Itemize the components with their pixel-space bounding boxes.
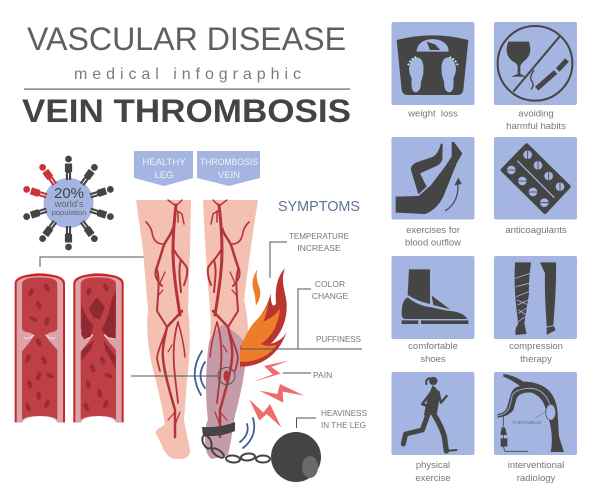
- icon: runner: [403, 377, 456, 451]
- healthy vessel: [15, 273, 65, 422]
- icon: pulse waves near clot: [195, 351, 205, 395]
- icon: ball and chain: [200, 422, 321, 482]
- icon: blister pack: [503, 145, 569, 212]
- icon: shoe: [402, 269, 468, 324]
- icon: raised legs: [396, 142, 462, 214]
- icon: pulse waves near ankle: [240, 418, 254, 448]
- thrombosis leg: [203, 200, 258, 459]
- panel: compression therapy: therapy: [520, 354, 552, 365]
- icon: flame: [240, 268, 287, 367]
- panel: physical exercise: [392, 372, 474, 484]
- panel: comfortable shoes: [392, 256, 474, 365]
- banner: healthy leg: HEALTHY: [142, 157, 186, 168]
- connector: vessels to healthy leg: [40, 257, 153, 267]
- panel: compression therapy: compression: [509, 341, 563, 352]
- panel: physical exercise: exercise: [415, 473, 451, 484]
- icon: scale: [397, 35, 468, 95]
- icon: lightning bolts: [249, 360, 304, 427]
- panel: anticoagulants: [494, 137, 577, 236]
- panel: exercises for blood outflow: exercises for: [406, 225, 460, 236]
- panel: anticoagulants: anticoagulants: [505, 225, 567, 236]
- thrombosed vessel: [73, 273, 124, 422]
- panel: comfortable shoes: shoes: [420, 354, 446, 365]
- clot marker: [218, 368, 235, 384]
- panel: avoiding harmful habits: [494, 22, 577, 132]
- symptom: color change: CHANGE: [312, 291, 349, 301]
- ankle cuff: [202, 422, 235, 436]
- connector: vessels to clot: [131, 375, 218, 377]
- banner: healthy leg: LEG: [154, 170, 174, 181]
- banner: thrombosis vein: VEIN: [218, 170, 240, 181]
- symptom: color change: [298, 279, 349, 349]
- symptom: heaviness in the leg: HEAVINESS: [321, 408, 367, 418]
- population text: 20%: [54, 185, 84, 202]
- symptom: pain: [283, 370, 332, 380]
- population text: world's: [53, 199, 84, 210]
- panel: interventional radiology: interventional: [508, 460, 564, 471]
- iron ball: [271, 432, 321, 482]
- symptom: heaviness in the leg: [296, 408, 367, 430]
- banner: thrombosis vein: [197, 151, 260, 186]
- panel: interventional radiology: [494, 372, 577, 484]
- blood vessels: [15, 273, 124, 422]
- title: vascular disease: VASCULAR DISEASE: [27, 21, 346, 57]
- panel: comfortable shoes: comfortable: [408, 341, 458, 352]
- discoloured lower leg: [205, 325, 247, 459]
- symptom: pain: PAIN: [313, 370, 332, 380]
- panel: weight loss: weight loss: [407, 108, 458, 120]
- panel: weight loss: [392, 22, 474, 120]
- panel: avoiding harmful habits: harmful habits: [506, 121, 566, 132]
- icon: catheter in vein: THROMBUS: [512, 420, 541, 425]
- symptom: color change: COLOR: [315, 279, 345, 289]
- world population diagram: [22, 156, 115, 250]
- chain: [200, 434, 270, 463]
- symptom: puffiness: [240, 334, 362, 349]
- symptom: temperature increase: [270, 231, 349, 278]
- symptom: temperature increase: TEMPERATURE: [289, 231, 349, 241]
- banner: healthy leg: [134, 151, 193, 186]
- population circle: [44, 178, 94, 228]
- symptom: puffiness: PUFFINESS: [316, 334, 361, 344]
- subtitle: medical infographic: [74, 66, 301, 83]
- icon: no alcohol or smoking: [498, 26, 572, 101]
- panel: physical exercise: physical: [416, 460, 450, 471]
- panel: avoiding harmful habits: avoiding: [518, 108, 554, 120]
- symptoms heading: SYMPTOMS: [278, 198, 360, 215]
- panel: exercises for blood outflow: [392, 137, 474, 248]
- population text: [52, 185, 86, 217]
- people ring: [22, 156, 115, 250]
- population text: population: [52, 208, 86, 217]
- symptom: temperature increase: INCREASE: [297, 243, 341, 253]
- banner: thrombosis vein: THROMBOSIS: [200, 157, 258, 168]
- healthy leg: [136, 200, 191, 459]
- panel: interventional radiology: radiology: [517, 473, 556, 484]
- icon: compression legs: [515, 262, 556, 335]
- panel: exercises for blood outflow: blood outflow: [405, 238, 461, 248]
- panel: compression therapy: [494, 256, 577, 365]
- symptom: heaviness in the leg: IN THE LEG: [321, 420, 366, 430]
- heading: vein thrombosis: VEIN THROMBOSIS: [22, 93, 351, 129]
